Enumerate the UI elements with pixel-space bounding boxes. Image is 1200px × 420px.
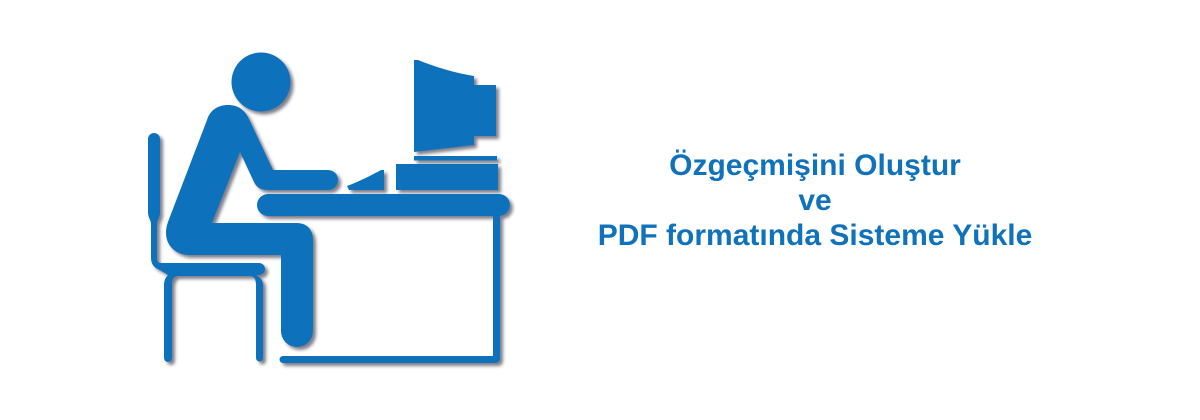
heading line 2: ve [798, 184, 832, 217]
icon: computer stand [414, 156, 497, 160]
heading line 1: Özgeçmişini Oluştur [669, 149, 961, 182]
icon: mouse [347, 170, 384, 190]
icon: torso, arm and leg [166, 105, 338, 347]
heading line 3: PDF formatında Sisteme Yükle [598, 219, 1032, 252]
icon: computer case [396, 164, 498, 190]
icon: head [232, 52, 290, 112]
icon: chair [148, 133, 265, 362]
icon: monitor [414, 60, 496, 152]
icon: desk [257, 194, 510, 363]
